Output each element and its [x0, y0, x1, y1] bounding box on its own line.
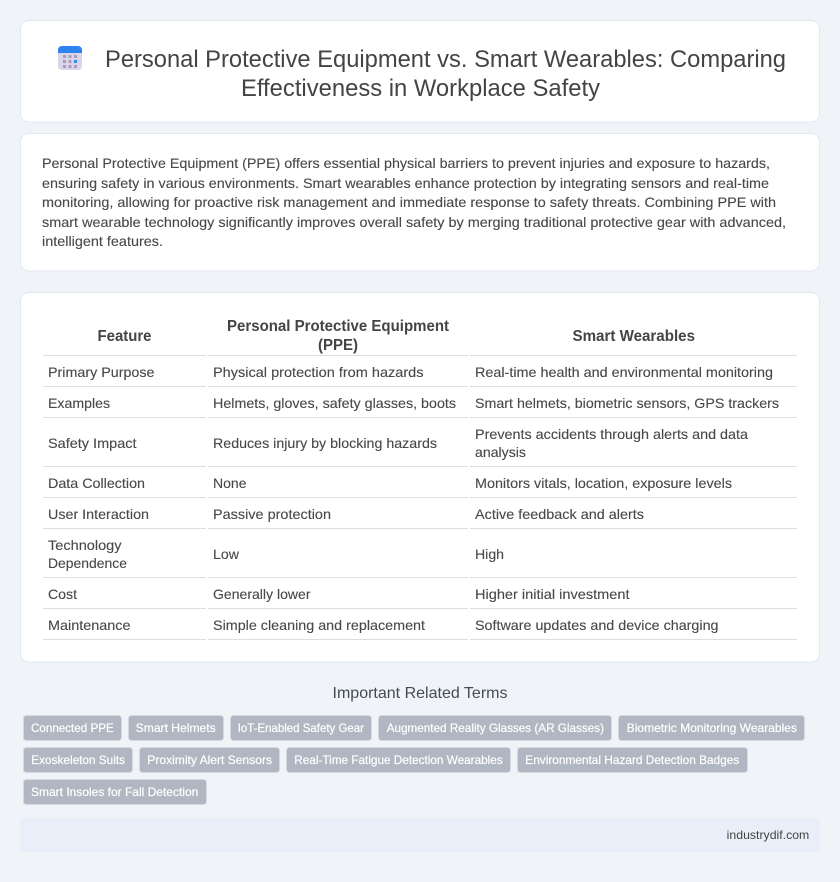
row: maintenance — [48, 617, 718, 633]
row: cost: Generally lower — [213, 586, 311, 602]
row: data collection: Monitors vitals, location, exposure levels — [475, 475, 732, 491]
row: cost — [48, 586, 630, 602]
row: data collection: Data Collection — [48, 475, 145, 491]
row: examples: Helmets, gloves, safety glasses, boots — [213, 395, 456, 411]
title: Effectiveness in Workplace Safety — [241, 75, 600, 102]
row: technology dependence: Technology — [48, 537, 121, 553]
tag: ar glasses: Augmented Reality Glasses (AR Glasses) — [387, 721, 604, 735]
row: maintenance: Simple cleaning and replacement — [213, 617, 425, 633]
table header row — [98, 318, 695, 354]
row: user interaction — [48, 506, 644, 522]
row: safety impact — [48, 426, 748, 460]
tag: environmental hazard detection badges: Environmental Hazard Detection Badges — [525, 753, 739, 767]
tag: exoskeleton suits — [24, 748, 132, 772]
tag: smart insoles for fall detection — [24, 780, 206, 804]
row: data collection — [48, 475, 732, 491]
table rules — [43, 355, 797, 640]
text block: introduction paragraph: ensuring safety in various environments. Smart wearables enhance protection by integrating sensors and real-time — [42, 175, 769, 191]
tag: exoskeleton suits: Exoskeleton Suits — [31, 753, 125, 767]
row: examples: Smart helmets, biometric sensors, GPS trackers — [475, 395, 779, 411]
row: examples — [48, 395, 779, 411]
footer — [20, 818, 820, 852]
footer: industrydif.com — [727, 828, 809, 842]
row: data collection: None — [213, 475, 247, 491]
text block: introduction paragraph: monitoring, allowing for proactive risk management and immediate response to safety threats. Combining PPE with — [42, 194, 776, 210]
tag: connected ppe — [24, 716, 122, 740]
icon: calendar — [58, 46, 82, 70]
row: technology dependence: High — [475, 546, 504, 562]
row: safety impact: Reduces injury by blocking hazards — [213, 435, 437, 451]
row: technology dependence: Low — [213, 546, 240, 562]
row: user interaction: User Interaction — [48, 506, 149, 522]
row: cost: Cost — [48, 586, 77, 602]
row: primary purpose: Physical protection from hazards — [213, 364, 424, 380]
text block: introduction paragraph — [42, 155, 786, 249]
tag: real-time fatigue detection wearables: Real-Time Fatigue Detection Wearables — [294, 753, 503, 767]
tag: connected ppe: Connected PPE — [31, 721, 114, 735]
row: safety impact: Prevents accidents through alerts and data — [475, 426, 748, 442]
tag: biometric monitoring wearables — [618, 716, 804, 740]
row: primary purpose: Primary Purpose — [48, 364, 155, 380]
table header row: Smart Wearables — [572, 328, 695, 345]
tag: ar glasses — [378, 716, 612, 740]
heading: important related terms: Important Related Terms — [332, 685, 508, 702]
row: technology dependence: Dependence — [48, 555, 127, 571]
row: examples: Examples — [48, 395, 110, 411]
tag: smart helmets — [128, 716, 224, 740]
panel: comparison table — [20, 292, 820, 662]
row: maintenance: Software updates and device charging — [475, 617, 718, 633]
panel: introduction — [20, 134, 820, 271]
tag: smart helmets: Smart Helmets — [136, 721, 216, 735]
row: primary purpose: Real-time health and environmental monitoring — [475, 364, 773, 380]
row: maintenance: Maintenance — [48, 617, 131, 633]
row: user interaction: Passive protection — [213, 506, 331, 522]
table header row: Feature — [98, 328, 152, 345]
title: Personal Protective Equipment vs. Smart Wearables: Comparing — [105, 46, 786, 73]
table header row: Personal Protective Equipment — [227, 318, 450, 335]
tag: proximity alert sensors — [140, 748, 280, 772]
row: user interaction: Active feedback and alerts — [475, 506, 644, 522]
row: safety impact: analysis — [475, 444, 526, 460]
panel: title header — [20, 20, 820, 122]
tag: environmental hazard detection badges — [518, 748, 748, 772]
tag group: related terms — [24, 716, 804, 804]
row: primary purpose — [48, 364, 773, 380]
tag: real-time fatigue detection wearables — [286, 748, 510, 772]
tag: proximity alert sensors: Proximity Alert Sensors — [147, 753, 272, 767]
row: safety impact: Safety Impact — [48, 435, 137, 451]
tag: smart insoles for fall detection: Smart Insoles for Fall Detection — [31, 785, 198, 799]
title — [105, 46, 786, 102]
row: cost: Higher initial investment — [475, 586, 630, 602]
table header row: (PPE) — [318, 337, 358, 354]
tag: iot-enabled safety gear: IoT-Enabled Safety Gear — [238, 721, 364, 735]
row: technology dependence — [48, 537, 504, 571]
text block: introduction paragraph: Personal Protective Equipment (PPE) offers essential physical barriers to prevent injuries and exposure to hazards, — [42, 155, 770, 171]
text block: introduction paragraph: intelligent features. — [42, 233, 163, 249]
tag: biometric monitoring wearables: Biometric Monitoring Wearables — [627, 721, 797, 735]
text block: introduction paragraph: smart wearable technology significantly improves overall safety by merging traditional protective gear with advanced, — [42, 214, 786, 230]
tag: iot-enabled safety gear — [230, 716, 372, 740]
